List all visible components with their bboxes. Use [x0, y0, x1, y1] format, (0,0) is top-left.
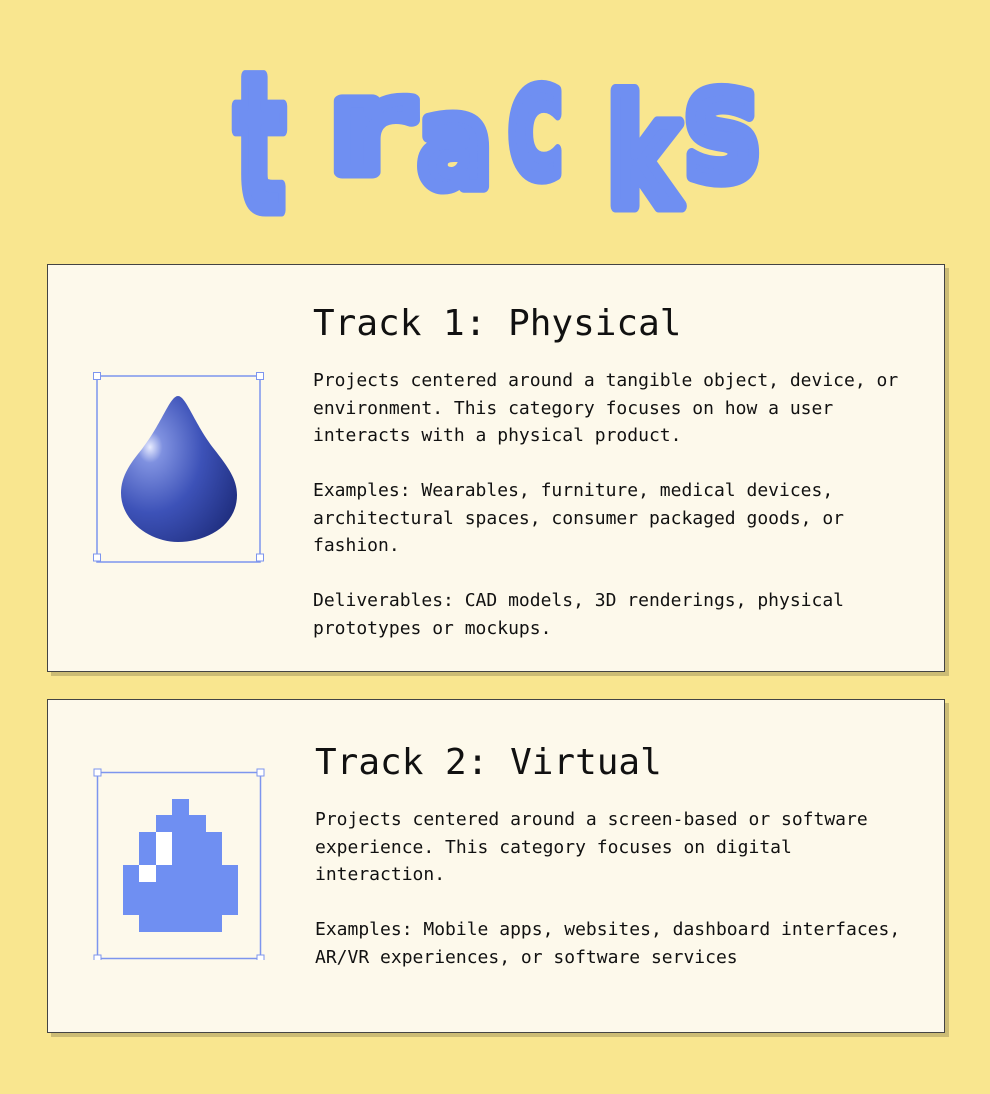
- title: c: [508, 27, 564, 214]
- title: k: [606, 65, 682, 240]
- icon: 3D water drop: [93, 372, 264, 563]
- title: r: [328, 51, 412, 203]
- icon: pixel water drop: [94, 768, 264, 960]
- heading: Track 2: Track 2: Virtual: [315, 742, 662, 783]
- body text: Track 2: Projects centered around a screen-based or software experience. This category focuses on digital interaction. Examples: Mobile apps, websites, dashboard interfaces, AR/VR experiences, or software services: [315, 809, 900, 968]
- heading: Track 1: Track 1: Physical: [313, 303, 681, 344]
- panel: track 1 physical: [47, 264, 945, 672]
- body text: Track 1: Projects centered around a tangible object, device, or environment. This category focuses on how a user interacts with a physical product. Examples: Wearables, furniture, medical devices, architectural spaces, consumer packaged goods, or fashion. Deliverables: CAD models, 3D renderings, physical prototypes or mockups.: [313, 370, 898, 638]
- panel: track 2 virtual: [47, 699, 945, 1033]
- title: [232, 27, 760, 240]
- title: a: [418, 71, 492, 216]
- title: s: [684, 30, 760, 217]
